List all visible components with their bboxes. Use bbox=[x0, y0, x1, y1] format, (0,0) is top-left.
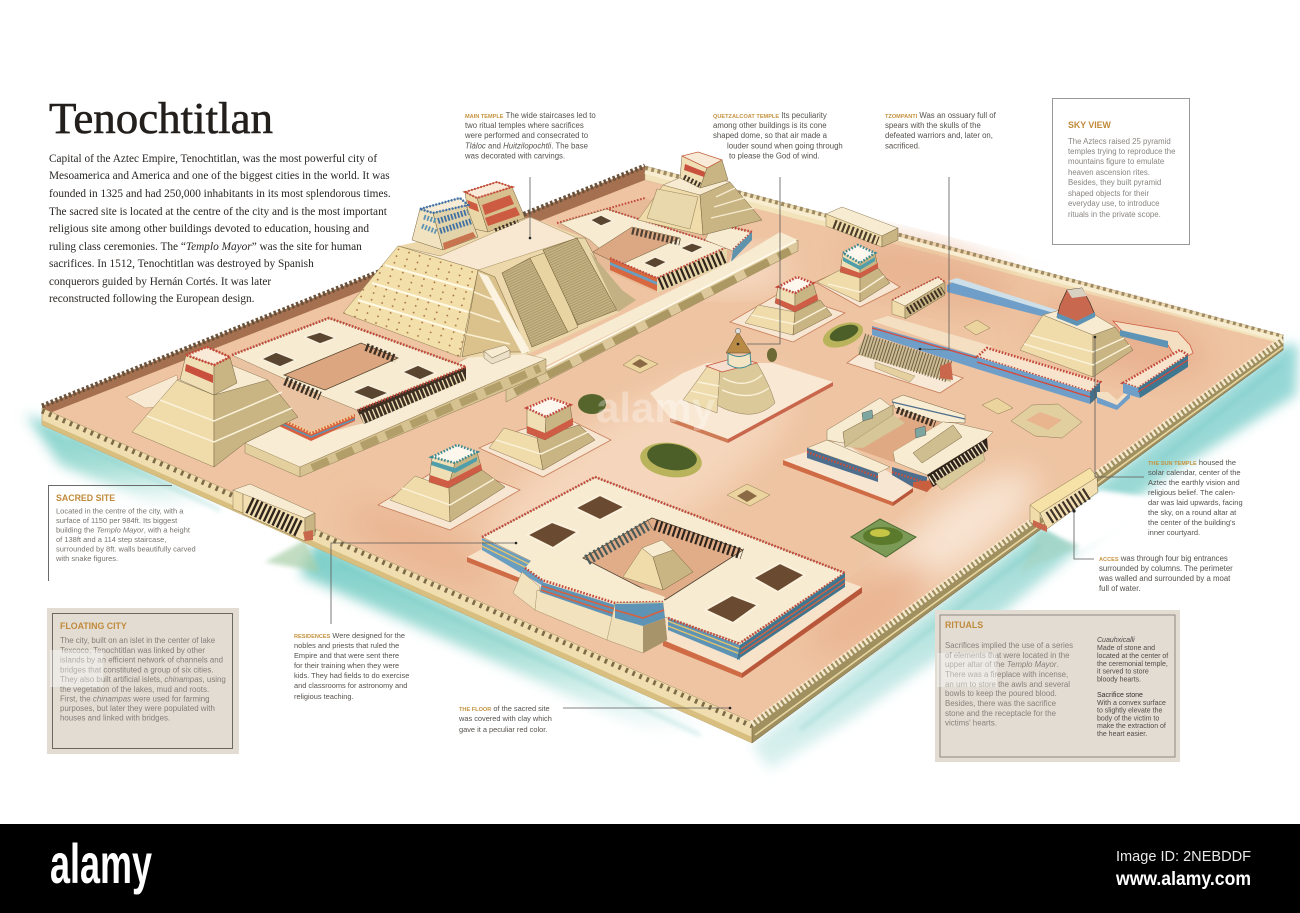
intro paragraph: founded in 1325 and had 250,000 inhabitants in its most splendorous times. bbox=[49, 188, 391, 200]
callout: residences: religious teaching. bbox=[294, 692, 354, 701]
floor mottling bbox=[338, 228, 1215, 671]
inner courtyard bbox=[583, 518, 743, 600]
outer right roof bbox=[893, 422, 993, 475]
callout: tzompantli: spears with the skulls of the bbox=[885, 121, 981, 130]
courtyard bbox=[845, 415, 950, 462]
teal temple upper right bbox=[815, 245, 900, 307]
callout: access: was walled and surrounded by a moat bbox=[1098, 574, 1231, 583]
dotted face bbox=[343, 246, 478, 357]
footer image id: Image ID: 2NEBDDF bbox=[1116, 848, 1251, 865]
panel: floating city: islands by an efficient network of channels and bbox=[60, 656, 223, 664]
central red pyramid D bbox=[479, 398, 611, 477]
callout: the floor: THE FLOOR of the sacred site bbox=[459, 704, 550, 713]
callout: the floor bbox=[458, 704, 731, 734]
callout: quetzalcoatl temple: louder sound when going through bbox=[727, 142, 843, 150]
callout: the floor: gave it a peculiar red color. bbox=[459, 725, 547, 734]
gate: right entrance bbox=[1030, 468, 1098, 532]
callout: residences: kids. They had fields to do exercise bbox=[294, 671, 409, 680]
left bands bbox=[482, 538, 543, 586]
callout: sun temple: solar calendar, center of the bbox=[1148, 468, 1241, 477]
rituals: cuauhxicalli note: bloody hearts. bbox=[1097, 676, 1141, 684]
back left crenellation bbox=[42, 166, 645, 406]
panel: floating city: FLOATING CITY bbox=[60, 621, 127, 631]
back right crenellation bbox=[645, 168, 1283, 337]
stairs two bbox=[543, 238, 617, 325]
rituals: sacrifice stone note: the heart easier. bbox=[1097, 731, 1147, 738]
callout: residences: for their training when they were bbox=[294, 661, 399, 670]
footer bar bbox=[0, 824, 1300, 913]
intro title: Tenochtitlan bbox=[49, 94, 273, 143]
panel: sky view: rituals in the private scope. bbox=[1068, 210, 1161, 219]
panel: rituals: Besides, there was the sacrifice bbox=[945, 699, 1057, 708]
moat water bbox=[26, 345, 1298, 770]
intro paragraph: ruling class ceremonies. The “Templo Mayor” was the site for human bbox=[49, 241, 362, 253]
callout: residences: and classrooms for astronomy and bbox=[294, 681, 407, 690]
top pyramid bbox=[638, 152, 762, 235]
rituals: cuauhxicalli note bbox=[1097, 637, 1168, 684]
intro paragraph: Mesoamerica and America and one of the biggest cities in the world. It was bbox=[49, 170, 390, 182]
panel: rituals: bowls to keep the poured blood. bbox=[945, 689, 1057, 698]
platform bbox=[398, 217, 577, 270]
small entrance building bbox=[892, 277, 945, 319]
footer logo: alamy bbox=[50, 832, 152, 895]
red temple centre right bbox=[730, 277, 845, 342]
callout: main temple: was decorated with carvings. bbox=[464, 152, 565, 160]
back wall right face bbox=[645, 166, 1283, 350]
panel: sky view: mountains figure to emulate bbox=[1068, 157, 1164, 166]
callout: tzompantli: defeated warriors and, later on, bbox=[885, 131, 993, 140]
panel: sacred site: SACRED SITE bbox=[56, 493, 115, 503]
main temple pyramid (Templo Mayor) bbox=[343, 217, 636, 364]
palace platform bbox=[783, 440, 913, 502]
panel: floating city: The city, built on an islet in the center of lake bbox=[60, 636, 216, 645]
plaza floor and perimeter wall bbox=[42, 166, 1283, 743]
sun pyramid bbox=[1020, 288, 1133, 377]
rituals: sacrifice stone note: With a convex surface bbox=[1097, 700, 1166, 707]
callout: residences: nobles and priests that ruled the bbox=[294, 641, 399, 650]
panel: sacred site: surrounded by 8ft. walls beautifully carved bbox=[56, 544, 196, 554]
panel: rituals: Sacrifices implied the use of a series bbox=[945, 641, 1073, 650]
panel: sky view: Besides, they built pyramid bbox=[1068, 178, 1161, 187]
rituals: cuauhxicalli note: Made of stone and bbox=[1097, 645, 1155, 652]
footer url: www.alamy.com bbox=[1115, 869, 1251, 890]
intro paragraph: reconstructed following the European design. bbox=[49, 293, 255, 305]
callout: sun temple: dar was laid upwards, facing bbox=[1148, 498, 1243, 507]
long front building bbox=[977, 348, 1100, 404]
intro paragraph: sacrifices. In 1512, Tenochtitlan was destroyed by Spanish bbox=[49, 258, 314, 270]
round tiers bbox=[717, 363, 775, 414]
callout: tzompantli bbox=[885, 111, 997, 350]
callout: tzompantli: sacrificed. bbox=[885, 142, 920, 150]
left pyramid bbox=[126, 347, 298, 467]
panel: sky view: temples trying to reproduce the bbox=[1068, 147, 1175, 156]
tzompantli and sun temple compound bbox=[847, 277, 1193, 410]
right wing bands bbox=[668, 618, 740, 660]
intro paragraph bbox=[49, 153, 391, 305]
side wall bbox=[872, 326, 977, 369]
rituals: cuauhxicalli note: located at the center of bbox=[1097, 653, 1168, 660]
panel: rituals: of elements that were located in the bbox=[945, 651, 1070, 660]
rituals: sacrifice stone note bbox=[1097, 692, 1166, 738]
panel: sky view: everyday use, to introduce bbox=[1068, 199, 1159, 208]
watermark patch bbox=[50, 650, 103, 687]
callout: access: ACCES was through four big entrances bbox=[1099, 554, 1228, 563]
right wing building bbox=[1123, 350, 1188, 398]
callout: quetzalcoatl temple: to please the God of wind. bbox=[729, 152, 820, 160]
panel: sacred site: Located in the centre of the city, with a bbox=[56, 506, 184, 516]
callout: sun temple: the sky, on a round altar at bbox=[1148, 508, 1237, 517]
callout: residences: RESIDENCES Were designed for the bbox=[294, 631, 405, 640]
callout: main temple: two ritual temples where sacrifices bbox=[465, 121, 584, 130]
colonnade bbox=[927, 438, 988, 487]
Quetzalcoatl cone temple bbox=[650, 328, 833, 443]
upper compound behind main temple bbox=[557, 198, 752, 293]
left compound skylights bbox=[261, 332, 436, 400]
panel: sacred site: building the Templo Mayor, with a height bbox=[56, 526, 191, 534]
panel: floating city: houses and linked with bridges. bbox=[60, 714, 170, 722]
callout: main temple: MAIN TEMPLE The wide staircases led to bbox=[465, 111, 596, 120]
panel: floating city: First, the chinampas were used for farming bbox=[60, 694, 210, 704]
front right wall bbox=[752, 337, 1283, 743]
intro paragraph: Capital of the Aztec Empire, Tenochtitlan, was the most powerful city of bbox=[49, 153, 377, 165]
stepped front bbox=[683, 367, 720, 413]
left wing bbox=[827, 398, 893, 443]
panel: sacred site: of 138ft and a 114 step staircase, bbox=[56, 535, 166, 544]
callout: sun temple bbox=[1094, 336, 1243, 537]
corner connector bbox=[1097, 392, 1130, 410]
callout: residences bbox=[294, 542, 517, 701]
middle right courtyard palace bbox=[783, 395, 993, 506]
callout: sun temple: religious belief. The calen- bbox=[1148, 488, 1236, 497]
callout: sun temple: the center of the building's bbox=[1148, 518, 1236, 527]
callout: main temple bbox=[464, 111, 596, 239]
rituals watermark patch bbox=[937, 653, 997, 687]
rituals: sacrifice stone note: to slightly elevate the bbox=[1097, 708, 1162, 714]
cylinder bbox=[728, 353, 751, 368]
rituals: cuauhxicalli note: it served to store bbox=[1097, 668, 1149, 676]
intro paragraph: The sacred site is located at the centre of the city and is the most important bbox=[49, 206, 388, 218]
panel: sky view: heaven ascension rites. bbox=[1068, 168, 1150, 177]
blue temple (Tlaloc) bbox=[412, 198, 478, 250]
callout: sun temple: inner courtyard. bbox=[1148, 528, 1200, 537]
panel: rituals: RITUALS bbox=[945, 620, 983, 630]
stock watermark on the plaza: alamy bbox=[596, 384, 716, 431]
panel: floating city bbox=[47, 608, 239, 754]
panel: floating city: Texcoco, Tenochtitlan was linked by other bbox=[60, 646, 205, 655]
floor bbox=[42, 180, 1283, 724]
inner block and ramp bbox=[893, 422, 955, 460]
callout: quetzalcoatl temple bbox=[713, 111, 843, 345]
intro paragraph: religious site among other buildings devoted to education, housing and bbox=[49, 223, 369, 235]
panel: rituals: There was a fireplace with incense, bbox=[945, 670, 1068, 679]
callout: sun temple: Aztec the earthly vision and bbox=[1148, 478, 1240, 487]
panel: rituals: an urn to store the awls and several bbox=[945, 680, 1070, 689]
small shrine bbox=[484, 345, 510, 358]
callout: access: full of water. bbox=[1099, 584, 1141, 593]
teal pyramid E bbox=[378, 445, 520, 530]
skylights bbox=[527, 495, 805, 623]
great lower compound (residences) bbox=[467, 477, 862, 678]
gate: left entrance bbox=[233, 484, 315, 541]
panel: rituals: stone and the receptacle for the bbox=[945, 709, 1057, 718]
courtyard pyramid bbox=[623, 540, 693, 590]
panel: rituals bbox=[935, 610, 1180, 762]
staircase of top pyramid bbox=[647, 189, 698, 229]
rituals: cuauhxicalli note: the ceremonial temple, bbox=[1097, 661, 1168, 668]
twin temples on top bbox=[412, 182, 525, 250]
rituals: cuauhxicalli note: Cuauhxicalli bbox=[1097, 637, 1135, 644]
central balustrade bbox=[530, 252, 578, 332]
panel: sacred site: surface of 1150 per 984ft. Its biggest bbox=[56, 516, 178, 525]
callout: access bbox=[1072, 509, 1233, 593]
panel: rituals: victims' hearts. bbox=[945, 718, 997, 728]
callout: tzompantli: TZOMPANTI Was an ossuary full of bbox=[885, 111, 997, 120]
callout: quetzalcoatl temple: among other buildings is its cone bbox=[713, 121, 827, 130]
left compound bbox=[232, 318, 466, 441]
callout: quetzalcoatl temple: QUETZALCOAT TEMPLE Its peculiarity bbox=[713, 111, 827, 120]
front left wall bbox=[42, 408, 752, 743]
corner face bbox=[462, 270, 528, 357]
back right wing bbox=[1113, 321, 1193, 362]
callout: quetzalcoatl temple: shaped dome, so that air made a bbox=[713, 131, 828, 140]
panel: floating city: They also built artificial islets, chinampas, using bbox=[60, 675, 226, 684]
callout: main temple: Tláloc and Huitzilopochtli. The base bbox=[465, 142, 588, 150]
callout: main temple: were performed and consecrated to bbox=[464, 131, 589, 140]
panel: sacred site: with snake figures. bbox=[55, 554, 118, 563]
panel: floating city: bridges that constituted a group of six cities. bbox=[60, 666, 214, 674]
panel: sky view: shaped objects for their bbox=[1068, 189, 1149, 198]
second band bbox=[892, 467, 927, 492]
callout: access: surrounded by columns. The perimeter bbox=[1099, 564, 1233, 573]
stairs one bbox=[502, 258, 568, 347]
intro paragraph: conquerors guided by Hernán Cortés. It was later bbox=[49, 276, 271, 288]
front left wing bbox=[807, 440, 890, 473]
panel: sacred site bbox=[48, 486, 196, 581]
panel: floating city: the vegetation of the lakes, mud and roots. bbox=[60, 685, 209, 694]
rituals: sacrifice stone note: Sacrifice stone bbox=[1097, 692, 1143, 699]
panel: rituals: upper altar of the Templo Mayor. bbox=[945, 660, 1059, 669]
panel: sky view: The Aztecs raised 25 pyramid bbox=[1068, 137, 1171, 146]
callout: sun temple: THE SUN TEMPLE housed the bbox=[1148, 458, 1236, 467]
callout: residences: Empire and that were sent there bbox=[294, 651, 399, 660]
rituals: sacrifice stone note: make the extraction of bbox=[1097, 723, 1166, 730]
rituals: sacrifice stone note: body of the victim to bbox=[1097, 716, 1159, 722]
small stone altars bbox=[623, 320, 1082, 506]
red temple (Huitzilopochtli) bbox=[465, 182, 525, 232]
callout: the floor: was covered with clay which bbox=[458, 714, 552, 723]
back wall left face bbox=[42, 166, 645, 420]
panel: floating city: purposes, but later they were populated with bbox=[60, 704, 215, 713]
trees and gardens bbox=[578, 317, 916, 557]
cone temple platform bbox=[650, 363, 833, 439]
front block bbox=[525, 550, 667, 653]
gate: back entrance bbox=[826, 207, 898, 247]
tzompantli skull rack bbox=[847, 335, 963, 393]
roof bbox=[482, 477, 845, 643]
long terrace with stair insets bbox=[245, 232, 798, 477]
lower compound platform bbox=[467, 490, 862, 673]
panel: sky view: SKY VIEW bbox=[1068, 120, 1112, 130]
conical dome bbox=[726, 332, 751, 353]
back wing bbox=[892, 395, 965, 423]
panel: sky view bbox=[1052, 98, 1190, 244]
back wall bbox=[947, 280, 1057, 320]
